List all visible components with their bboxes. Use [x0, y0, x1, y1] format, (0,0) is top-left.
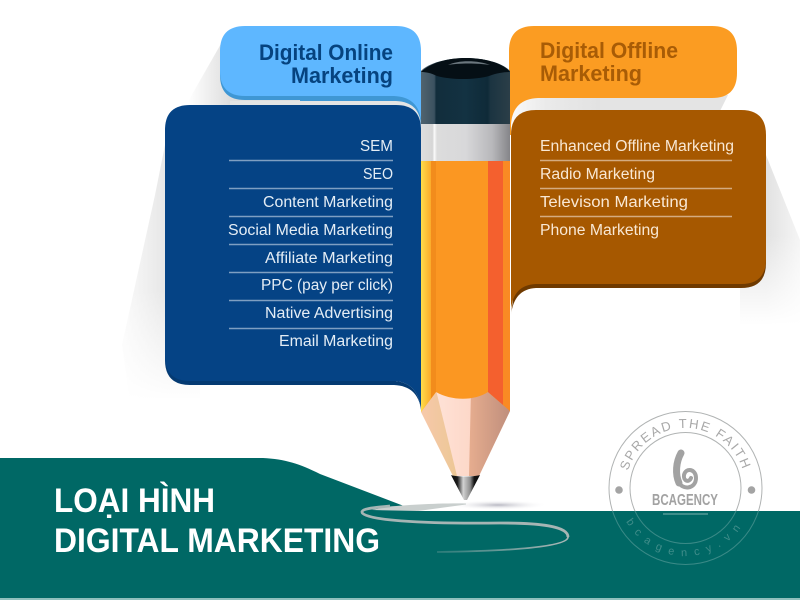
list items: online: [228, 138, 393, 350]
list items: online: SEM: [360, 138, 393, 155]
pencil wood cone: [421, 385, 510, 476]
panel: Digital Offline Marketing: [509, 26, 766, 315]
bottom teal band: [0, 458, 800, 598]
list items: offline: Phone Marketing: [540, 222, 659, 239]
list items: offline: [540, 138, 734, 239]
stamp text: spread the faith: SPREAD THE FAITH: [620, 419, 750, 470]
heading: Digital Online Marketing: Marketing: [291, 63, 393, 88]
list items: online: Social Media Marketing: [228, 222, 393, 239]
title: DIGITAL MARKETING: [54, 522, 380, 560]
list items: online: Email Marketing: [279, 333, 393, 350]
list items: offline: Radio Marketing: [540, 166, 655, 183]
stamp text: website: bcagency.vn: [626, 518, 740, 556]
list items: online: Native Advertising: [265, 305, 393, 322]
stamp dots: [615, 486, 755, 494]
list items: offline: Televison Marketing: [540, 194, 688, 211]
heading: Digital Online Marketing: [259, 40, 393, 88]
heading tab depth: [220, 30, 421, 130]
logo stamp: BC Agency: [608, 411, 762, 565]
heading: Digital Offline Marketing: Digital Offline: [540, 38, 678, 63]
heading tab face: [509, 26, 737, 135]
stamp underline: [663, 513, 708, 515]
stamp rings over teal: [612, 511, 759, 565]
pencil graphite tip: [451, 475, 480, 500]
list panel tail lower edge: [394, 381, 421, 410]
list panel body: [165, 105, 421, 410]
list items: offline: Enhanced Offline Marketing: [540, 138, 734, 155]
pencil body: [421, 160, 510, 420]
light edge above list panel: [230, 101, 421, 140]
stamp swirl mark: [677, 453, 696, 487]
list items: online: Affiliate Marketing: [265, 250, 393, 267]
list items: online: SEO: [363, 166, 393, 183]
panel: Digital Online Marketing: [165, 26, 421, 410]
heading: Digital Offline Marketing: Marketing: [540, 61, 642, 86]
light edge above list panel: [511, 98, 600, 135]
cast shadow: left panel: [110, 42, 300, 402]
list panel body: [511, 110, 766, 310]
stamp rings over white: [608, 411, 762, 511]
list items: online: Content Marketing: [263, 194, 393, 211]
list items: online: PPC (pay per click): [261, 277, 393, 294]
bottom light edge: [0, 598, 800, 600]
icon: pencil: [421, 58, 510, 500]
list panel depth: [165, 110, 396, 385]
cast shadow: right panel: [560, 95, 800, 332]
pencil scribble line: [362, 503, 568, 552]
list panel depth: [511, 120, 766, 315]
heading: Digital Online Marketing: Digital Online: [259, 40, 393, 65]
pencil eraser cap: [421, 58, 510, 124]
pencil metal ferrule: [421, 124, 510, 161]
heading tab face: [220, 26, 421, 120]
pencil ground shadow: [448, 500, 548, 510]
title: LOẠI HÌNH: [54, 482, 215, 520]
heading: Digital Offline Marketing: [540, 38, 678, 86]
stamp wordmark: BCAGENCY: [652, 492, 718, 509]
